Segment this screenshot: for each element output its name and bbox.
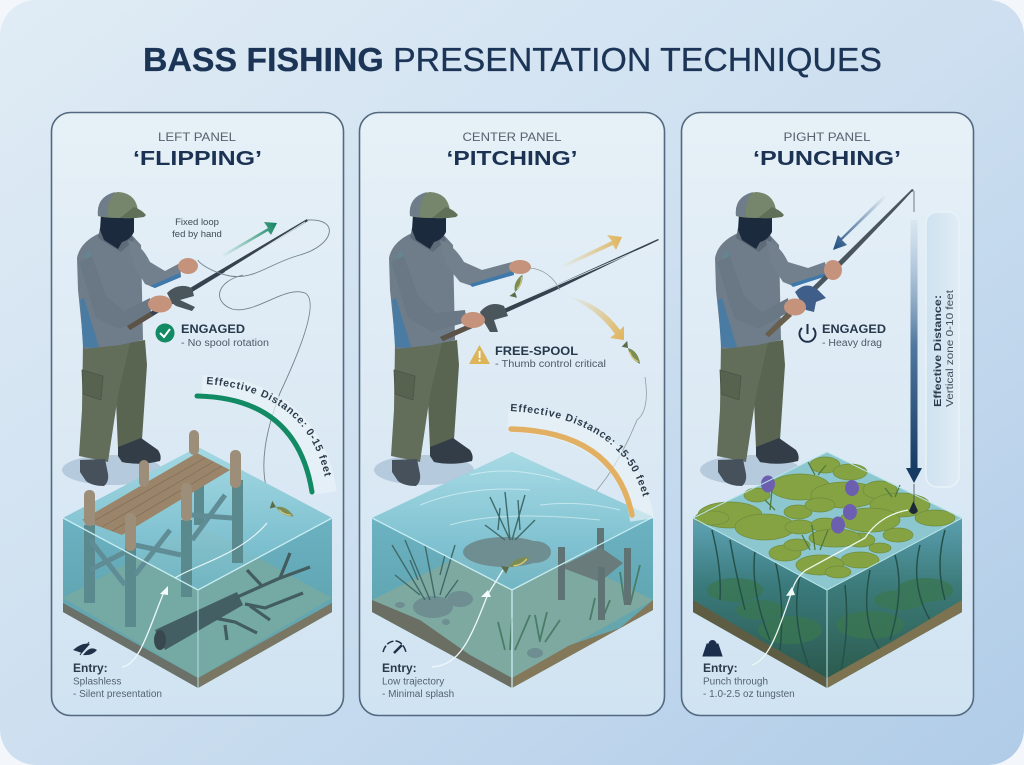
vertical zone callout: Vertical zone 0-10 feet bbox=[945, 290, 956, 407]
entry path arrow bbox=[432, 570, 503, 667]
panel label: left panel: LEFT PANEL bbox=[158, 132, 237, 144]
panel: punching bbox=[682, 112, 974, 716]
baitfish in hand bbox=[509, 273, 525, 299]
title: BASS FISHING PRESENTATION TECHNIQUES bbox=[143, 41, 882, 78]
panel: flipping bbox=[50, 112, 344, 716]
panel: pitching bbox=[358, 112, 666, 716]
icon: splash bbox=[73, 642, 97, 655]
entry note: - Minimal splash bbox=[382, 689, 454, 700]
water cube: rocks, plants and dock bbox=[372, 452, 653, 688]
blue motion arrow bbox=[833, 195, 887, 250]
water cube: lily pads and weeds bbox=[693, 452, 962, 688]
entry note: - Silent presentation bbox=[73, 689, 162, 700]
entry note: Low trajectory bbox=[382, 676, 444, 688]
status: engaged: ENGAGED bbox=[181, 322, 245, 336]
water cube: dock and log bbox=[63, 430, 332, 688]
status: free-spool: - Thumb control critical bbox=[495, 359, 606, 370]
icon: speed gauge bbox=[383, 641, 406, 653]
panel label: center panel: CENTER PANEL bbox=[462, 132, 562, 144]
heading: pitching: ‘PITCHING’ bbox=[446, 148, 578, 170]
gold arc arrow upward bbox=[560, 235, 622, 268]
status: engaged bbox=[800, 322, 886, 349]
fishing line loop bbox=[198, 220, 329, 503]
angler with rod bbox=[374, 192, 659, 486]
vertical zone callout: Effective Distance: bbox=[933, 295, 944, 407]
panel label: right panel: PIGHT PANEL bbox=[784, 132, 871, 144]
flying fish bbox=[621, 341, 644, 366]
label: fixed loop: Fixed loop bbox=[175, 217, 219, 228]
status: engaged: ENGAGED bbox=[822, 322, 886, 336]
entry note: Entry: bbox=[703, 661, 738, 675]
green motion arrow bbox=[220, 222, 277, 258]
angler with rod bbox=[700, 189, 914, 486]
effective distance arc: Effective Distance: 0-15 feet bbox=[206, 376, 332, 476]
line to target bbox=[530, 268, 646, 547]
status: engaged: - Heavy drag bbox=[822, 338, 882, 349]
entry note: Splashless bbox=[73, 676, 121, 688]
effective distance arc: Effective Distance: 15-50 feet bbox=[510, 404, 650, 497]
entry note: Punch through bbox=[703, 676, 768, 688]
heading: punching: ‘PUNCHING’ bbox=[753, 148, 901, 170]
entry note: - 1.0-2.5 oz tungsten bbox=[703, 689, 795, 700]
status: free-spool bbox=[469, 344, 606, 370]
label: fixed loop: fed by hand bbox=[172, 229, 222, 240]
vertical zone callout bbox=[926, 212, 959, 487]
tungsten sinker bbox=[909, 484, 918, 514]
entry note: Entry: bbox=[73, 661, 108, 675]
status: free-spool: FREE-SPOOL bbox=[495, 344, 578, 358]
status: engaged bbox=[156, 322, 269, 349]
entry path arrow bbox=[122, 523, 267, 667]
status: engaged: - No spool rotation bbox=[181, 338, 269, 349]
bass lure bbox=[269, 501, 296, 519]
angler with rod bbox=[62, 192, 308, 486]
icon: weight bbox=[703, 641, 722, 656]
entry path arrow bbox=[752, 510, 908, 665]
vertical drop arrow bbox=[906, 191, 922, 483]
heading: flipping: ‘FLIPPING’ bbox=[133, 148, 262, 170]
lure on surface bbox=[501, 552, 531, 574]
entry note: Entry: bbox=[382, 661, 417, 675]
gold arrow downward bbox=[567, 296, 624, 340]
